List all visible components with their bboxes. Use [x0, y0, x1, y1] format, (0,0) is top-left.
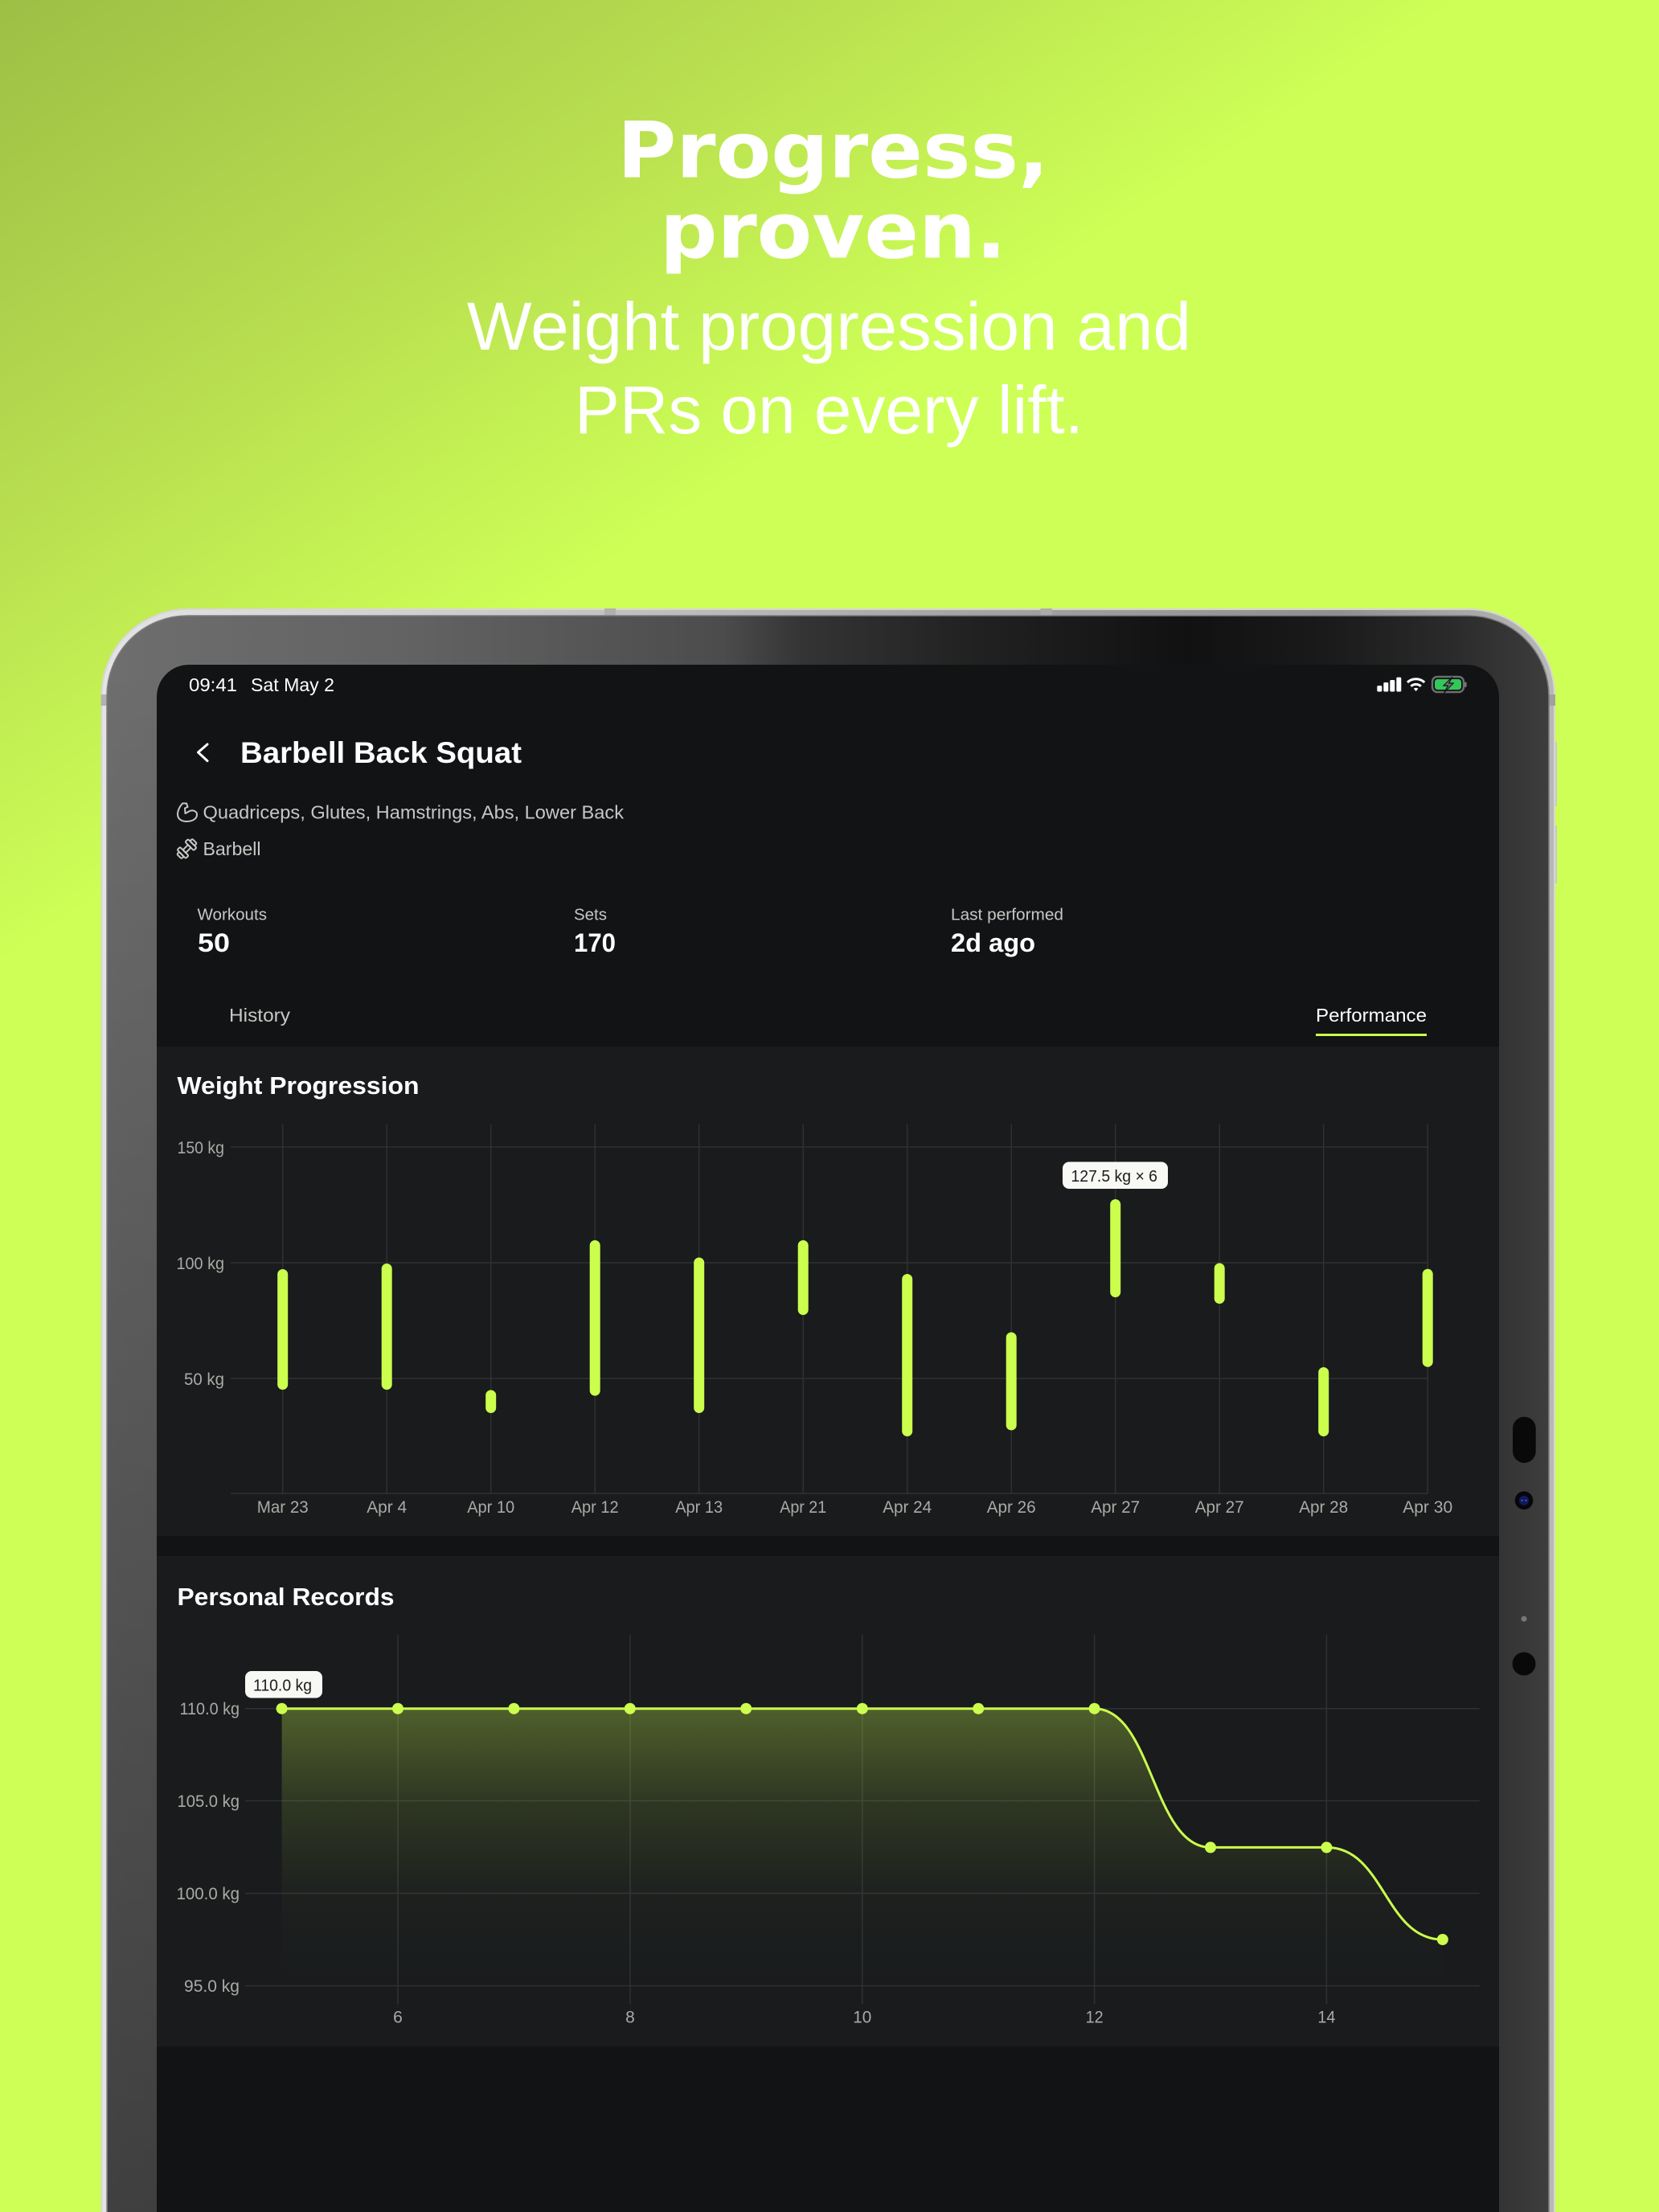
- tooltip: 127.5 kg x 6: [1063, 1162, 1168, 1189]
- ambient light dot: [1521, 1616, 1527, 1622]
- icon: signal bars: [1377, 678, 1401, 691]
- screen: [157, 665, 1499, 2212]
- stat: last performed: 2d ago: [951, 928, 1035, 957]
- panel: weight progression: [157, 1047, 1499, 1536]
- y axis labels: 150 kg: [177, 1139, 224, 1157]
- x axis labels: Apr 27: [1091, 1498, 1140, 1517]
- y axis labels: 105.0 kg: [177, 1792, 240, 1811]
- device frame: [101, 608, 1557, 2212]
- x axis labels: Apr 26: [987, 1498, 1036, 1517]
- x axis labels: 6: [393, 2009, 403, 2027]
- x axis labels: [257, 1498, 1452, 1517]
- y axis labels: [177, 1139, 224, 1389]
- icon: barbell: [175, 837, 199, 861]
- heading: Personal Records: [177, 1583, 394, 1611]
- stat: last performed: [951, 907, 1063, 957]
- heading: Weight Progression: [177, 1071, 420, 1100]
- stat: sets: Sets: [574, 907, 607, 924]
- x axis labels: Apr 27: [1195, 1498, 1244, 1517]
- tooltip: 110.0 kg: 110.0 kg: [253, 1677, 312, 1694]
- tab: performance active: Performance: [1316, 1005, 1427, 1026]
- line: [282, 1709, 1443, 1940]
- y axis labels: 95.0 kg: [184, 1977, 240, 1996]
- y axis labels: [177, 1700, 240, 1996]
- tooltip: 127.5 kg x 6: 127.5 kg × 6: [1071, 1168, 1157, 1186]
- front camera sensors: [1513, 1417, 1536, 1675]
- status bar time: [189, 674, 334, 695]
- x axis labels: 8: [625, 2009, 635, 2027]
- exercise title: Barbell Back Squat: [240, 736, 522, 769]
- status bar time: 09:41: [189, 674, 237, 695]
- x axis labels: 14: [1317, 2009, 1336, 2027]
- data points: [276, 1703, 1448, 1945]
- range bars: [277, 1199, 1433, 1436]
- icon: back chevron: [198, 744, 207, 761]
- stat: sets: [574, 907, 616, 957]
- y axis labels: 50 kg: [184, 1370, 224, 1389]
- x axis labels: [393, 2009, 1336, 2027]
- x axis labels: 10: [853, 2009, 871, 2027]
- subtitle: Weight progression and: [467, 289, 1191, 364]
- x axis labels: Mar 23: [257, 1498, 309, 1517]
- muscles text: Quadriceps, Glutes, Hamstrings, Abs, Lower Back: [203, 802, 625, 823]
- tab: performance active: [1316, 1005, 1427, 1036]
- x axis labels: Apr 30: [1403, 1498, 1452, 1517]
- tooltip: 110.0 kg: [245, 1671, 322, 1698]
- sensor pill: [1513, 1417, 1536, 1463]
- x axis labels: Apr 12: [571, 1498, 619, 1517]
- icon: wifi: [1407, 679, 1424, 691]
- subtitle: [467, 289, 1191, 448]
- tablet device: [101, 608, 1557, 2212]
- y axis labels: 110.0 kg: [180, 1700, 240, 1718]
- x axis labels: Apr 4: [367, 1498, 408, 1517]
- title: [617, 106, 1049, 276]
- x axis labels: Apr 10: [467, 1498, 514, 1517]
- panel: personal records: [157, 1556, 1499, 2046]
- icon: battery charging: [1432, 677, 1467, 693]
- sensor circle: [1513, 1653, 1535, 1675]
- grid: [231, 1124, 1428, 1493]
- status bar time: Sat May 2: [251, 674, 334, 695]
- grid: [245, 1635, 1480, 2005]
- y axis labels: 100.0 kg: [177, 1885, 240, 1903]
- x axis labels: Apr 13: [675, 1498, 723, 1517]
- stat: sets: 170: [574, 928, 616, 957]
- x axis labels: 12: [1086, 2009, 1104, 2027]
- tab: history: History: [229, 1005, 291, 1026]
- title: Progress,: [617, 106, 1049, 196]
- x axis labels: Apr 24: [883, 1498, 932, 1517]
- stat: workouts: 50: [198, 928, 230, 957]
- x axis labels: Apr 21: [780, 1498, 826, 1517]
- x axis labels: Apr 28: [1299, 1498, 1348, 1517]
- stat: last performed: Last performed: [951, 907, 1063, 924]
- stat: workouts: [198, 907, 267, 957]
- y axis labels: 100 kg: [177, 1255, 224, 1273]
- icon: muscle: [178, 804, 197, 821]
- equipment text: Barbell: [203, 838, 260, 859]
- camera lens: [1515, 1491, 1533, 1509]
- area fill: [282, 1709, 1443, 1986]
- subtitle: PRs on every lift.: [575, 372, 1083, 448]
- stat: workouts: Workouts: [198, 907, 267, 924]
- title: proven.: [660, 186, 1006, 276]
